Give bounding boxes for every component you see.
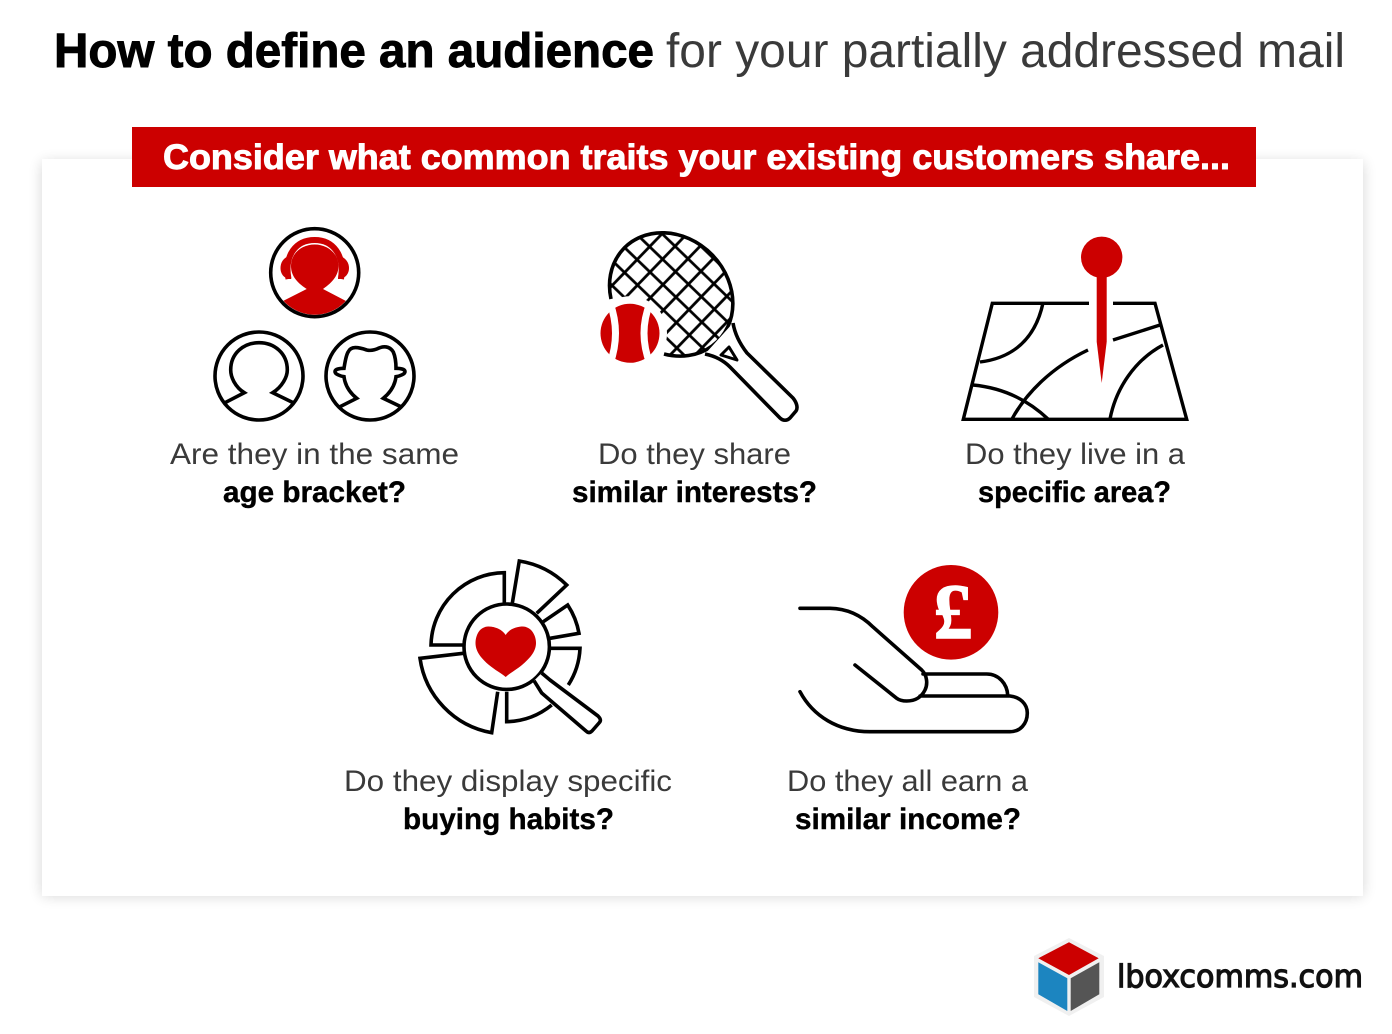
label: income: Do they all earn a xyxy=(787,765,1028,798)
icon: tennis racket and ball xyxy=(593,233,797,420)
banner heading xyxy=(132,127,1256,187)
logo: cube xyxy=(1034,938,1104,1016)
label: age bracket xyxy=(170,438,459,509)
label: area xyxy=(965,438,1185,509)
label: buying habits: Do they display specific xyxy=(344,765,672,798)
label: interests: similar interests? xyxy=(572,476,817,509)
title xyxy=(54,25,1345,78)
label: interests: Do they share xyxy=(598,438,791,471)
icon: hand with pound coin: £ xyxy=(934,568,972,655)
icon: people age bracket xyxy=(215,229,414,420)
label: interests xyxy=(572,438,817,509)
logo: wordmark: lboxcomms.com xyxy=(1117,959,1363,995)
label: income: similar income? xyxy=(795,803,1021,836)
label: buying habits: buying habits? xyxy=(403,803,614,836)
label: age bracket: age bracket? xyxy=(223,476,406,509)
panel: traits card xyxy=(42,159,1363,896)
title: for your partially addressed mail xyxy=(666,25,1345,78)
label: area: Do they live in a xyxy=(965,438,1185,471)
title: How to define an audience xyxy=(54,25,654,78)
icon: hand with pound coin xyxy=(800,565,1027,732)
label: buying habits xyxy=(344,765,672,836)
label: area: specific area? xyxy=(978,476,1171,509)
label: age bracket: Are they in the same xyxy=(170,438,459,471)
banner heading: Consider what common traits your existing customers share... xyxy=(163,138,1230,177)
icon: magnifier over heart chart xyxy=(420,561,600,733)
icon: map with pin xyxy=(963,237,1187,419)
label: income xyxy=(787,765,1028,836)
